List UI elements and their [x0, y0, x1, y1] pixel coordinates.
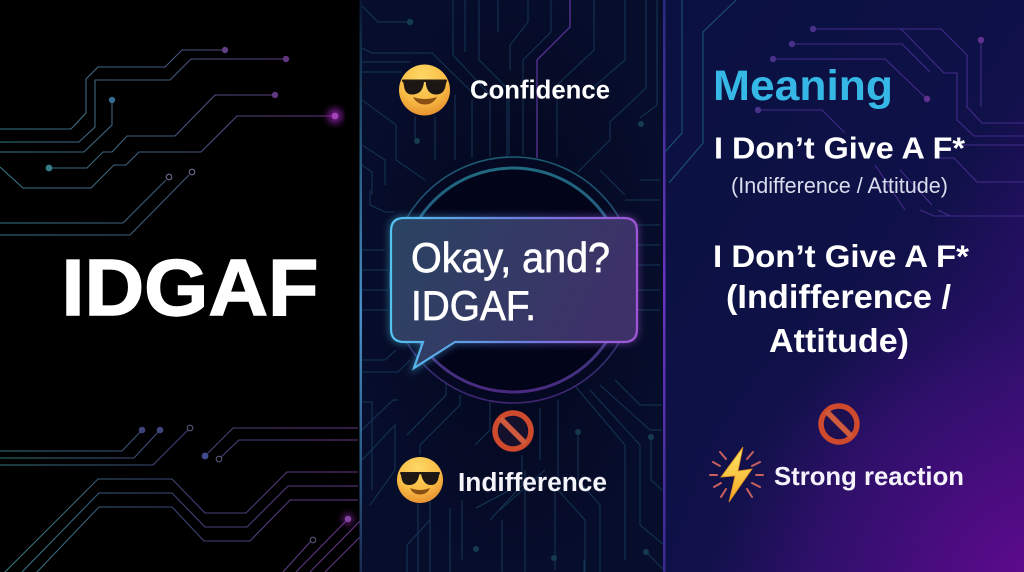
definition line: I Don’t Give A F*	[714, 130, 966, 166]
bubble text line 1: Okay, and?	[411, 234, 610, 281]
title: IDGAF: IDGAF	[62, 243, 318, 332]
circuit traces: bottom left	[0, 425, 360, 572]
icon: sunglasses face, indifference	[397, 457, 443, 503]
divider right	[663, 0, 666, 572]
icon: lightning bolt	[710, 447, 763, 502]
panel: term	[0, 0, 361, 572]
heading: Meaning: Meaning	[713, 62, 893, 110]
definition note: (Indifference / Attitude)	[731, 173, 948, 198]
icon: sunglasses face, confidence	[399, 64, 450, 116]
repeated definition: Attitude)	[769, 322, 909, 359]
circuit traces: centre panel	[362, 0, 664, 572]
label: Confidence: Confidence	[470, 74, 610, 104]
panel: example	[361, 0, 664, 572]
panel: meaning	[664, 0, 1024, 572]
bubble text line 2: IDGAF.	[411, 282, 536, 329]
repeated definition	[713, 238, 970, 359]
speech bubble	[391, 218, 637, 368]
icon: no entry, right	[821, 406, 857, 442]
circuit traces: right panel	[664, 0, 1024, 216]
icon: no entry, centre	[495, 413, 531, 449]
label: Strong reaction: Strong reaction	[774, 461, 964, 491]
purple trace	[537, 0, 570, 158]
glowing circle	[390, 157, 636, 403]
repeated definition: (Indifference /	[726, 278, 951, 315]
label: Indifference: Indifference	[458, 469, 607, 497]
repeated definition: I Don’t Give A F*	[713, 238, 970, 274]
circuit traces: top left	[0, 47, 343, 235]
divider left	[360, 0, 362, 572]
